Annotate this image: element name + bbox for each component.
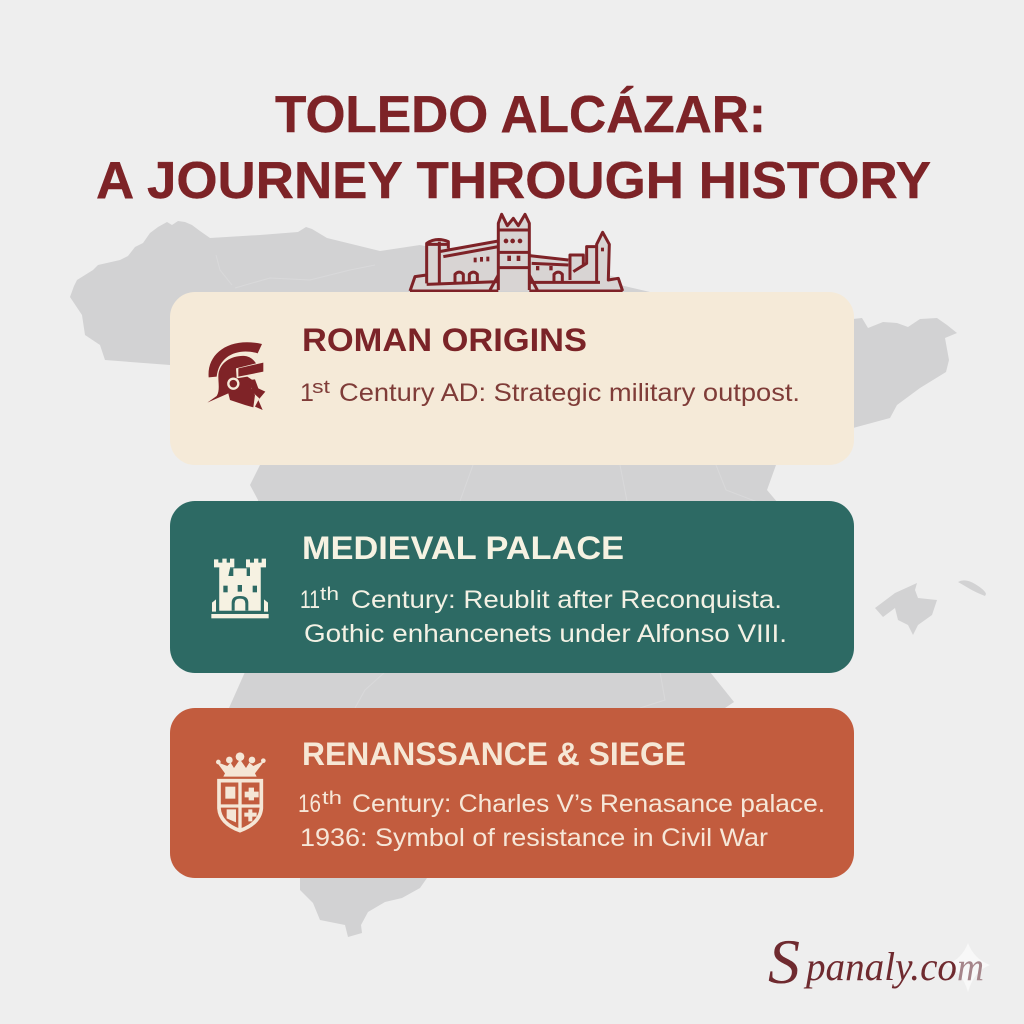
signature: Spanaly.com: panaly.co <box>803 944 957 989</box>
text: Roman origins description: Century AD: Strategic military outpost. <box>339 379 800 407</box>
signature: Spanaly.com: S <box>768 926 800 997</box>
background map of Spain <box>70 221 986 937</box>
text: Roman origins description: 1 <box>300 379 314 407</box>
title: TOLEDO ALCÁZAR: <box>275 86 766 144</box>
icon: sparkle <box>946 943 990 992</box>
text: Renaissance and siege description: 1936: Symbol of resistance in Civil War <box>300 824 768 852</box>
icon: Roman helmet <box>207 342 265 410</box>
text: Roman origins description: st <box>312 377 330 397</box>
heading: Renaissance and siege: RENANSSANCE & SIEGE <box>302 736 686 772</box>
panel: Renaissance and siege <box>170 708 854 878</box>
text: Renaissance and siege description: th <box>322 788 342 808</box>
title <box>96 86 931 210</box>
icon: medieval castle <box>211 559 269 618</box>
icon: Alcazar castle <box>410 214 623 291</box>
text: Medieval palace description: Gothic enhancenets under Alfonso VIII. <box>304 620 787 648</box>
title: A JOURNEY THROUGH HISTORY <box>96 152 931 210</box>
heading: Roman origins: ROMAN ORIGINS <box>302 322 587 358</box>
text: Renaissance and siege description: 16 <box>298 790 321 818</box>
text: Renaissance and siege description <box>298 788 825 852</box>
icon: royal crest <box>216 752 266 831</box>
signature: Spanaly.com <box>768 926 984 997</box>
text: Medieval palace description: th <box>320 584 339 604</box>
text: Renaissance and siege description: Century: Charles V’s Renasance palace. <box>352 790 825 818</box>
signature: Spanaly.com: m <box>957 944 984 989</box>
text: Medieval palace description: 11 <box>300 586 320 614</box>
text: Medieval palace description <box>300 584 787 648</box>
panel: Roman origins <box>170 292 854 465</box>
heading: Medieval palace: MEDIEVAL PALACE <box>302 530 624 566</box>
text: Medieval palace description: Century: Reublit after Reconquista. <box>351 586 782 614</box>
panel: Medieval palace <box>170 501 854 673</box>
